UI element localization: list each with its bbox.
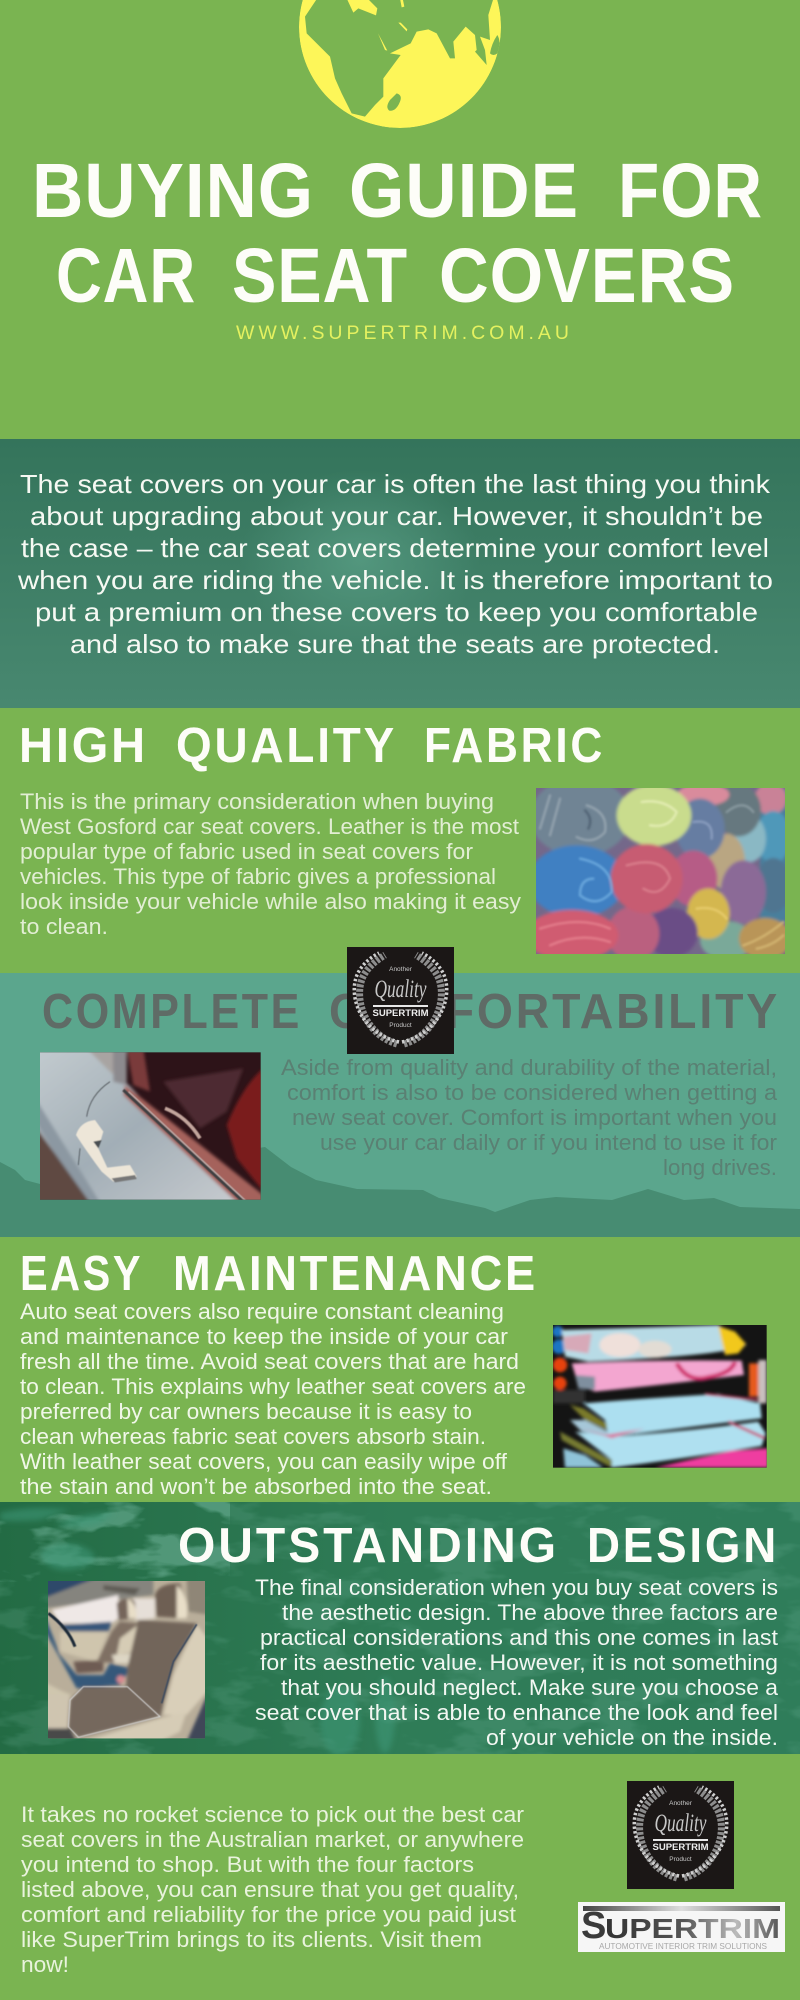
text: comfort body: use your car daily or if you intend to use it for — [320, 1130, 777, 1155]
heading: outstanding design: DESIGN — [587, 1519, 779, 1573]
intro text: the case – the car seat covers determine your comfort level — [21, 533, 769, 563]
heading: easy maintenance — [20, 1247, 538, 1301]
text: conclusion: like SuperTrim brings to its clients. Visit them — [21, 1927, 482, 1952]
panel: introduction — [0, 439, 800, 708]
icon: quality seal (footer): Product — [669, 1856, 692, 1863]
text: comfort body: long drives. — [663, 1155, 777, 1180]
icon: quality seal (overlapping heading) — [347, 947, 454, 1054]
text: design body: the aesthetic design. The above three factors are — [282, 1600, 778, 1625]
text: design body: seat cover that is able to enhance the look and feel — [255, 1700, 778, 1725]
icon: quality seal (overlapping heading): Product — [389, 1022, 412, 1029]
text: maintenance body: fresh all the time. Avoid seat covers that are hard — [20, 1349, 519, 1374]
text: maintenance body: Auto seat covers also require constant cleaning — [20, 1299, 504, 1324]
heading: complete comfortability: COMPLETE — [42, 985, 302, 1039]
heading: complete comfortability: COMFORTABILITY — [329, 985, 780, 1039]
icon: quality seal (footer) — [627, 1781, 734, 1889]
heading: high quality fabric: QUALITY — [176, 719, 397, 773]
heading: outstanding design: OUTSTANDING — [178, 1519, 559, 1573]
logo: supertrim: S — [581, 1905, 606, 1947]
text: comfort body: Aside from quality and durability of the material, — [281, 1055, 777, 1080]
text: design body: that you should neglect. Make sure you choose a — [281, 1675, 779, 1700]
text: design body: of your vehicle on the inside. — [486, 1725, 778, 1750]
heading: high quality fabric: FABRIC — [424, 719, 605, 773]
text: design body: practical considerations and this one comes in last — [260, 1625, 778, 1650]
text: conclusion: It takes no rocket science to pick out the best car — [21, 1802, 524, 1827]
text: design body: for its aesthetic value. However, it is not something — [260, 1650, 778, 1675]
intro text: about upgrading about your car. However, it shouldn’t be — [30, 501, 763, 531]
intro text: put a premium on these covers to keep you comfortable — [35, 597, 758, 627]
website url: WWW.SUPERTRIM.COM.AU — [236, 322, 569, 344]
heading: easy maintenance: MAINTENANCE — [173, 1247, 538, 1301]
icon: quality seal (footer): Another — [669, 1800, 693, 1807]
title: GUIDE — [349, 148, 579, 234]
text: maintenance body: to clean. This explains why leather seat covers are — [20, 1374, 526, 1399]
text: conclusion: you intend to shop. But with the four factors — [21, 1852, 474, 1877]
text: maintenance body: preferred by car owners because it is easy to — [20, 1399, 472, 1424]
panel: outstanding design — [0, 1502, 800, 1756]
text: fabric body — [20, 789, 521, 939]
text: design body — [255, 1575, 779, 1750]
text: fabric body: This is the primary consideration when buying — [20, 789, 494, 814]
mountain silhouette — [0, 1147, 800, 1237]
intro text: and also to make sure that the seats are protected. — [70, 629, 720, 659]
intro text: when you are riding the vehicle. It is therefore important to — [17, 565, 773, 595]
icon: quality seal (overlapping heading): Another — [389, 966, 413, 973]
title: FOR — [618, 148, 763, 234]
text: maintenance body: and maintenance to keep the inside of your car — [20, 1324, 508, 1349]
heading: complete comfortability — [42, 985, 780, 1039]
text: comfort body: new seat cover. Comfort is important when you — [292, 1105, 777, 1130]
text: conclusion: seat covers in the Australian market, or anywhere — [21, 1827, 524, 1852]
text: maintenance body: clean whereas fabric seat covers absorb stain. — [20, 1424, 486, 1449]
icon: yellow globe — [299, 0, 501, 128]
title: CAR — [56, 233, 196, 319]
heading: outstanding design — [178, 1519, 779, 1573]
icon: quality seal (overlapping heading): Quality — [374, 976, 427, 1003]
text: design body: The final consideration when you buy seat covers is — [255, 1575, 778, 1600]
title: COVERS — [439, 233, 735, 319]
icon: quality seal (footer): SUPERTRIM — [652, 1842, 709, 1853]
text: comfort body: comfort is also to be considered when getting a — [287, 1080, 778, 1105]
text: conclusion: listed above, you can ensure that you get quality, — [21, 1877, 519, 1902]
text: fabric body: West Gosford car seat covers. Leather is the most — [20, 814, 519, 839]
text: maintenance body: With leather seat covers, you can easily wipe off — [20, 1449, 508, 1474]
text: comfort body — [281, 1055, 778, 1180]
logo: supertrim: UPERTRIM — [605, 1913, 780, 1944]
panel: complete comfortability — [0, 973, 800, 1237]
text: conclusion: comfort and reliability for the price you paid just — [21, 1902, 516, 1927]
image: stacked towels — [552, 1325, 768, 1468]
text: fabric body: look inside your vehicle while also making it easy — [20, 889, 521, 914]
title — [32, 148, 763, 319]
image: rolled fabrics — [536, 788, 785, 954]
text: maintenance body: the stain and won’t be absorbed into the seat. — [20, 1474, 492, 1499]
intro text — [17, 469, 773, 659]
text: fabric body: to clean. — [20, 914, 108, 939]
icon: quality seal (footer): Quality — [654, 1810, 707, 1837]
text: conclusion — [21, 1802, 524, 1977]
text: fabric body: popular type of fabric used in seat covers for — [20, 839, 473, 864]
heading: high quality fabric — [19, 719, 605, 773]
intro text: The seat covers on your car is often the last thing you think — [20, 469, 771, 499]
heading: high quality fabric: HIGH — [19, 719, 148, 773]
heading: easy maintenance: EASY — [20, 1247, 143, 1301]
title: SEAT — [232, 233, 408, 319]
text: maintenance body — [20, 1299, 526, 1499]
logo: supertrim — [578, 1902, 785, 1952]
text: fabric body: vehicles. This type of fabric gives a professional — [20, 864, 496, 889]
image: car seat — [48, 1581, 205, 1738]
text: conclusion: now! — [21, 1952, 69, 1977]
image: car door handle — [40, 1052, 261, 1200]
logo: supertrim: AUTOMOTIVE INTERIOR TRIM SOLUTIONS — [599, 1941, 767, 1951]
title: BUYING — [32, 148, 314, 234]
icon: quality seal (overlapping heading): SUPERTRIM — [372, 1008, 429, 1019]
